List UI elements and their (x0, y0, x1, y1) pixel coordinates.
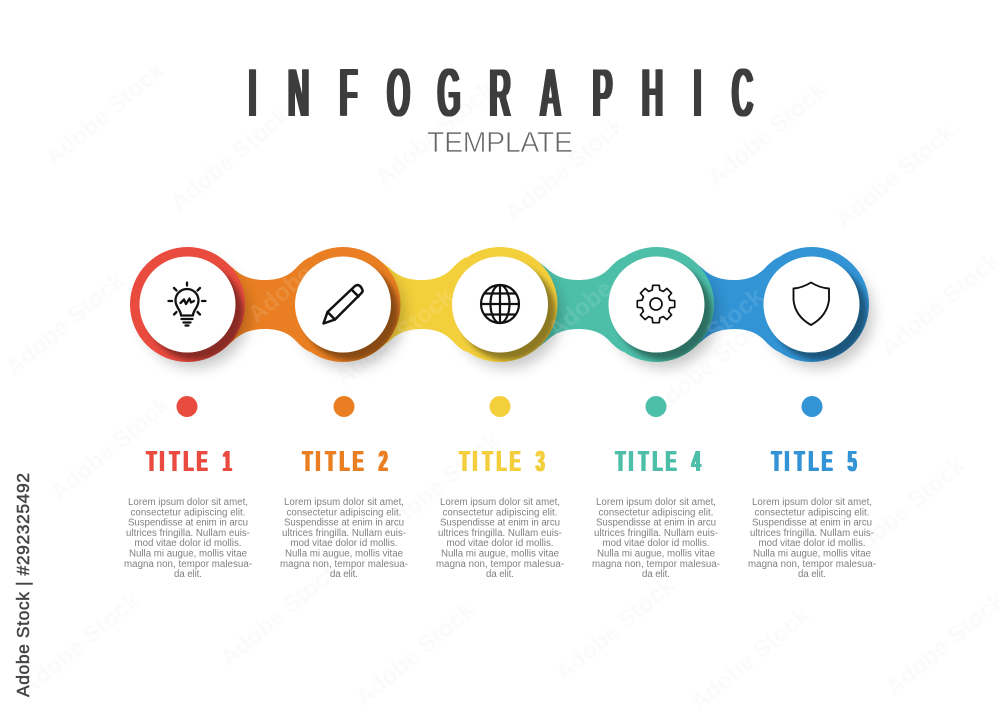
step 3 segment (376, 247, 562, 368)
heading: title 4: TITLE 4 (616, 445, 701, 477)
step 1 segment (130, 247, 249, 368)
text block: step 1: Suspendisse at enim in arcu (128, 518, 248, 529)
step 4 segment (534, 247, 718, 368)
watermark over band: Stock (391, 282, 459, 346)
text block: step 1: Nulla mi augue, mollis vitae (129, 548, 247, 560)
text block: step 2: mod vitae dolor id mollis. (290, 538, 398, 549)
watermark over band (243, 260, 769, 346)
title: INFOGRAPHIC (248, 55, 753, 133)
text block: step 5: ultrices fringilla. Nullam euis- (750, 528, 874, 539)
text block: step 5: Nulla mi augue, mollis vitae (753, 548, 871, 560)
text block: step 5: magna non, tempor malesua- (748, 559, 876, 570)
text block: step 2: consectetur adipiscing elit. (286, 507, 402, 518)
text block: step 4: da elit. (642, 569, 670, 580)
text block: step 3: ultrices fringilla. Nullam euis- (438, 528, 562, 539)
text block: step 2: Nulla mi augue, mollis vitae (285, 548, 403, 560)
text block: step 1: Lorem ipsum dolor sit amet, (128, 497, 248, 508)
icon: globe (481, 285, 519, 323)
text block: step 2: ultrices fringilla. Nullam euis- (282, 528, 406, 539)
text block: step 3: consectetur adipiscing elit. (442, 507, 558, 518)
icon: light bulb (168, 282, 206, 326)
text block: step 1 (124, 497, 252, 580)
text block: step 2: Lorem ipsum dolor sit amet, (284, 497, 404, 508)
icon: gear (637, 285, 675, 323)
subtitle: TEMPLATE (427, 127, 573, 159)
icon: shield (794, 282, 829, 325)
text block: step 2: magna non, tempor malesua- (280, 559, 408, 570)
text block: step 2: Suspendisse at enim in arcu (284, 518, 404, 529)
text block: step 3: da elit. (486, 569, 514, 580)
text block: step 5: consectetur adipiscing elit. (754, 507, 870, 518)
text block: step 2 (280, 497, 408, 580)
watermark over band: Adobe (243, 260, 317, 329)
heading: title 1: TITLE 1 (147, 445, 232, 477)
text block: step 3 (436, 497, 564, 580)
text block: step 4: ultrices fringilla. Nullam euis- (594, 528, 718, 539)
heading: title 3: TITLE 3 (460, 445, 545, 477)
text block: step 5 (748, 497, 876, 580)
icon: pencil (324, 285, 363, 324)
text block: step 4: Lorem ipsum dolor sit amet, (596, 497, 716, 508)
text block: step 4: consectetur adipiscing elit. (598, 507, 714, 518)
marker dots (176, 396, 822, 417)
text block: step 3: Lorem ipsum dolor sit amet, (440, 497, 560, 508)
text block: step 5: da elit. (798, 569, 826, 580)
text block: step 5: mod vitae dolor id mollis. (758, 538, 866, 549)
text block: step 1: ultrices fringilla. Nullam euis- (126, 528, 250, 539)
text block: step 5: Lorem ipsum dolor sit amet, (752, 497, 872, 508)
text block: step 3: Suspendisse at enim in arcu (440, 518, 560, 529)
watermark over band: Adobe (543, 275, 617, 344)
text block: step 1: magna non, tempor malesua- (124, 559, 252, 570)
heading: title 2: TITLE 2 (303, 445, 388, 477)
text block: step 4 (592, 497, 720, 580)
step 2 segment (220, 247, 404, 368)
text block: step 4: mod vitae dolor id mollis. (602, 538, 710, 549)
text block: step 1: mod vitae dolor id mollis. (134, 538, 242, 549)
text block: step 4: Nulla mi augue, mollis vitae (597, 548, 715, 560)
heading: title 5: TITLE 5 (772, 445, 857, 477)
timeline band (130, 247, 873, 368)
watermark over band: Stock (701, 282, 769, 346)
stock credit: Adobe Stock | #292325492 (13, 473, 33, 697)
text block: step 2: da elit. (330, 569, 358, 580)
text block: step 1: consectetur adipiscing elit. (130, 507, 246, 518)
text block: step 4: Suspendisse at enim in arcu (596, 518, 716, 529)
text block: step 1: da elit. (174, 569, 202, 580)
text block: step 5: Suspendisse at enim in arcu (752, 518, 872, 529)
text block: step 3: magna non, tempor malesua- (436, 559, 564, 570)
text block: step 3: Nulla mi augue, mollis vitae (441, 548, 559, 560)
text block: step 3: mod vitae dolor id mollis. (446, 538, 554, 549)
step 5 segment (689, 247, 873, 368)
text block: step 4: magna non, tempor malesua- (592, 559, 720, 570)
